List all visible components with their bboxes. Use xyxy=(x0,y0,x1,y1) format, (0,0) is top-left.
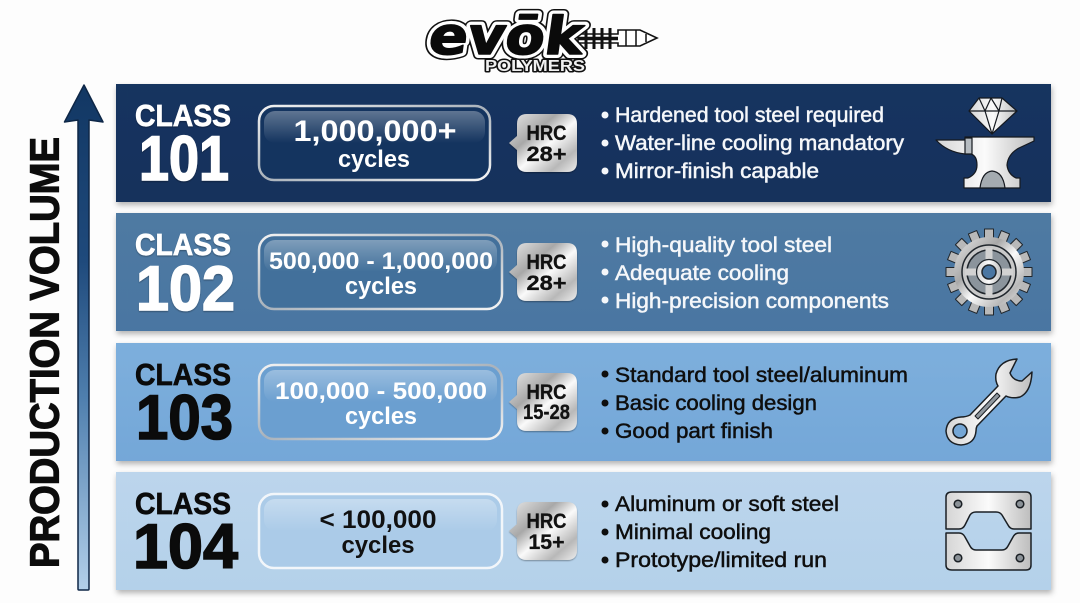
heading: class 104: 104 xyxy=(133,512,238,582)
cycle pill 102: 500,000 - 1,000,000 xyxy=(269,248,493,275)
cycle pill 104: cycles xyxy=(342,532,414,559)
hardness badge 102 xyxy=(509,243,577,301)
cycle pill 101 xyxy=(259,106,490,180)
panel: class 102 xyxy=(116,213,1051,331)
hardness badge 103 xyxy=(509,373,577,431)
logo: evok polymers xyxy=(425,7,657,75)
logo wordmark: evōk xyxy=(425,7,589,67)
logo wordmark: evōk xyxy=(425,7,589,67)
requirements list 103: Standard tool steel/aluminum xyxy=(615,363,908,387)
heading: class 103: 103 xyxy=(136,383,233,453)
requirements list 104 xyxy=(602,492,839,572)
logo wordmark: evōk xyxy=(425,7,589,67)
requirements list 102: Adequate cooling xyxy=(615,261,789,285)
hardness badge 101: 28+ xyxy=(526,143,566,166)
logo subtitle: POLYMERS xyxy=(485,58,585,75)
cycle pill 103: 100,000 - 500,000 xyxy=(275,378,487,405)
panel background 102 xyxy=(116,213,1051,331)
heading: class 104: CLASS xyxy=(135,486,231,521)
arrow: production volume axis xyxy=(64,85,103,590)
panel background 104 xyxy=(116,472,1051,590)
hardness badge 103: 15-28 xyxy=(523,401,570,424)
icon: wrench xyxy=(946,359,1032,445)
heading: class 101: CLASS xyxy=(135,98,231,133)
cycle pill 101: cycles xyxy=(338,146,410,173)
heading: class 103 xyxy=(135,357,233,453)
icon: gear xyxy=(946,229,1032,315)
requirements list 102: High-precision components xyxy=(615,289,889,313)
requirements list 104: Minimal cooling xyxy=(615,520,771,544)
requirements list 101: Mirror-finish capable xyxy=(615,159,819,183)
hardness badge 104: 15+ xyxy=(528,531,564,554)
heading: class 102: 102 xyxy=(136,254,235,324)
hardness badge 102: 28+ xyxy=(526,272,566,295)
hardness badge 104: HRC xyxy=(526,510,566,533)
cycle pill 103 xyxy=(259,365,502,439)
icon: diamond and anvil xyxy=(936,98,1034,188)
requirements list 102: High-quality tool steel xyxy=(615,233,832,257)
panel: class 101 xyxy=(116,84,1051,202)
requirements list 101: Hardened tool steel required xyxy=(615,103,884,127)
heading: class 101: 101 xyxy=(139,124,229,194)
axis title: production volume: PRODUCTION VOLUME xyxy=(22,137,68,568)
hardness badge 101 xyxy=(509,114,577,172)
requirements list 103: Basic cooling design xyxy=(615,391,817,415)
cycle pill 102: cycles xyxy=(345,273,417,300)
requirements list 104: Prototype/limited run xyxy=(615,548,827,572)
panel background 103 xyxy=(116,343,1051,461)
requirements list 101: Water-line cooling mandatory xyxy=(615,131,904,155)
hardness badge 102: HRC xyxy=(526,251,566,274)
panel: class 104 xyxy=(116,472,1051,590)
hardness badge 104 xyxy=(509,502,577,560)
requirements list 101 xyxy=(602,103,904,183)
panel background 101 xyxy=(116,84,1051,202)
heading: class 101 xyxy=(135,98,231,194)
cycle pill 103: cycles xyxy=(345,403,417,430)
heading: class 102 xyxy=(135,227,235,324)
cycle pill 104: < 100,000 xyxy=(320,506,436,534)
requirements list 102 xyxy=(602,233,889,313)
cycle pill 101: 1,000,000+ xyxy=(294,115,456,148)
logo drill bit xyxy=(578,28,657,49)
requirements list 103: Good part finish xyxy=(615,419,773,443)
requirements list 104: Aluminum or soft steel xyxy=(615,492,839,516)
panel: class 103 xyxy=(116,343,1051,461)
cycle pill 104 xyxy=(259,494,502,568)
requirements list 103 xyxy=(602,363,908,443)
hardness badge 103: HRC xyxy=(526,381,566,404)
hardness badge 101: HRC xyxy=(526,122,566,145)
heading: class 103: CLASS xyxy=(135,357,231,392)
heading: class 102: CLASS xyxy=(135,227,231,262)
cycle pill 102 xyxy=(259,235,502,309)
icon: mold plates xyxy=(946,492,1031,570)
